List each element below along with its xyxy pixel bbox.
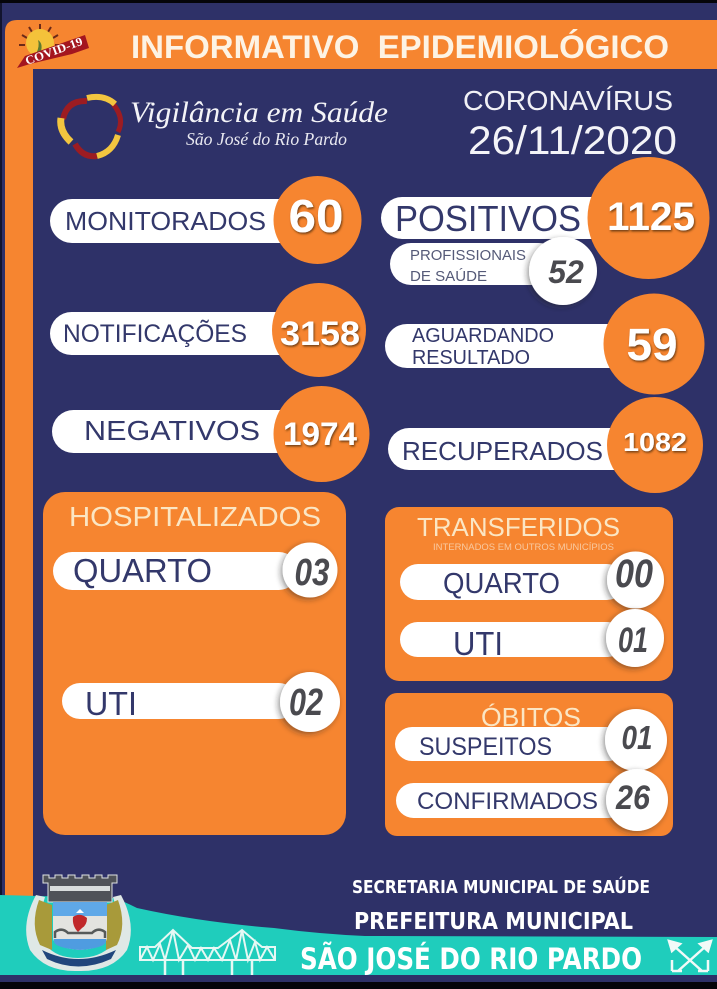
stat: notificações: 3158: [280, 315, 360, 353]
heading: hospitalizados: HOSPITALIZADOS: [69, 501, 321, 532]
stat: aguardando resultado: AGUARDANDO: [412, 325, 554, 347]
stat: recuperados: [388, 397, 703, 493]
title: INFORMATIVO EPIDEMIOLÓGICO: [131, 29, 669, 65]
stat: notificações: NOTIFICAÇÕES: [63, 319, 247, 348]
logo subtitle: São José do Rio Pardo: [186, 129, 347, 149]
icon: crossed tools: [669, 941, 711, 971]
row: confirmados: 26: [615, 779, 651, 817]
row: quarto: QUARTO: [73, 552, 212, 589]
row: suspeitos: SUSPEITOS: [419, 733, 552, 761]
heading: transferidos: TRANSFERIDOS: [417, 512, 620, 542]
footer: são josé do rio pardo: SÃO JOSÉ DO RIO PARDO: [300, 942, 642, 976]
stat: monitorados: 60: [288, 190, 344, 242]
panel: transferidos: [385, 507, 673, 681]
stat: negativos: NEGATIVOS: [84, 415, 260, 446]
stat: positivos: POSITIVOS: [395, 198, 581, 239]
row: uti: UTI: [453, 625, 503, 662]
row: uti: 01: [618, 621, 648, 660]
stat: recuperados: RECUPERADOS: [402, 436, 603, 466]
icon: circular arrows: [61, 97, 121, 156]
subheading: INTERNADOS EM OUTROS MUNICÍPIOS: [433, 542, 614, 553]
date: 26/11/2020: [468, 119, 677, 163]
row: uti: [62, 672, 340, 732]
row: quarto: QUARTO: [443, 568, 560, 600]
ribbon: [42, 950, 116, 966]
stat: profissionais de saúde: DE SAÚDE: [410, 268, 487, 285]
stat: positivos: 1125: [607, 195, 695, 239]
shield: [53, 902, 107, 950]
panel: hospitalizados: [43, 492, 346, 835]
covid-19 badge: [17, 24, 89, 68]
stat: aguardando resultado: 59: [626, 319, 678, 370]
row: quarto: [53, 542, 338, 598]
gold wheat: [35, 900, 122, 950]
footer: prefeitura: PREFEITURA MUNICIPAL: [354, 909, 633, 935]
row: uti: UTI: [85, 685, 137, 722]
stat: negativos: [52, 386, 370, 482]
panel: óbitos: [385, 693, 673, 836]
silver outer wreath: [26, 895, 131, 971]
stat: notificações: [50, 283, 366, 377]
stat: monitorados: MONITORADOS: [65, 206, 266, 236]
stat: aguardando resultado: [385, 294, 704, 394]
teal footer wave: [0, 895, 717, 975]
row: uti: 02: [289, 682, 323, 724]
coronavirus heading: CORONAVÍRUS: [463, 85, 673, 116]
covid-19 badge: COVID-19: [23, 34, 84, 68]
row: quarto: 03: [294, 552, 330, 594]
row: confirmados: [396, 769, 668, 831]
stat: positivos: [381, 157, 710, 279]
stat: negativos: 1974: [283, 416, 357, 452]
logo wordmark: Vigilância em Saúde: [130, 96, 388, 129]
row: confirmados: CONFIRMADOS: [417, 788, 598, 815]
tower: [43, 875, 117, 902]
heading: óbitos: ÓBITOS: [481, 702, 581, 732]
row: suspeitos: 01: [622, 719, 652, 756]
row: uti: [400, 609, 664, 667]
logo: vigilância em saúde: [61, 96, 388, 156]
stat: profissionais de saúde: PROFISSIONAIS: [410, 248, 526, 264]
icon: bridge: [140, 930, 275, 975]
row: suspeitos: [395, 709, 667, 771]
row: quarto: 00: [615, 552, 653, 596]
icon: city coat of arms: [26, 875, 131, 971]
stat: monitorados: [50, 176, 362, 264]
row: quarto: [400, 552, 664, 608]
stat: recuperados: 1082: [623, 427, 687, 457]
stat: aguardando resultado: RESULTADO: [412, 347, 530, 369]
footer: secretaria: SECRETARIA MUNICIPAL DE SAÚDE: [352, 876, 650, 898]
stat: profissionais de saúde: [390, 237, 597, 305]
stat: profissionais de saúde: 52: [548, 254, 584, 290]
